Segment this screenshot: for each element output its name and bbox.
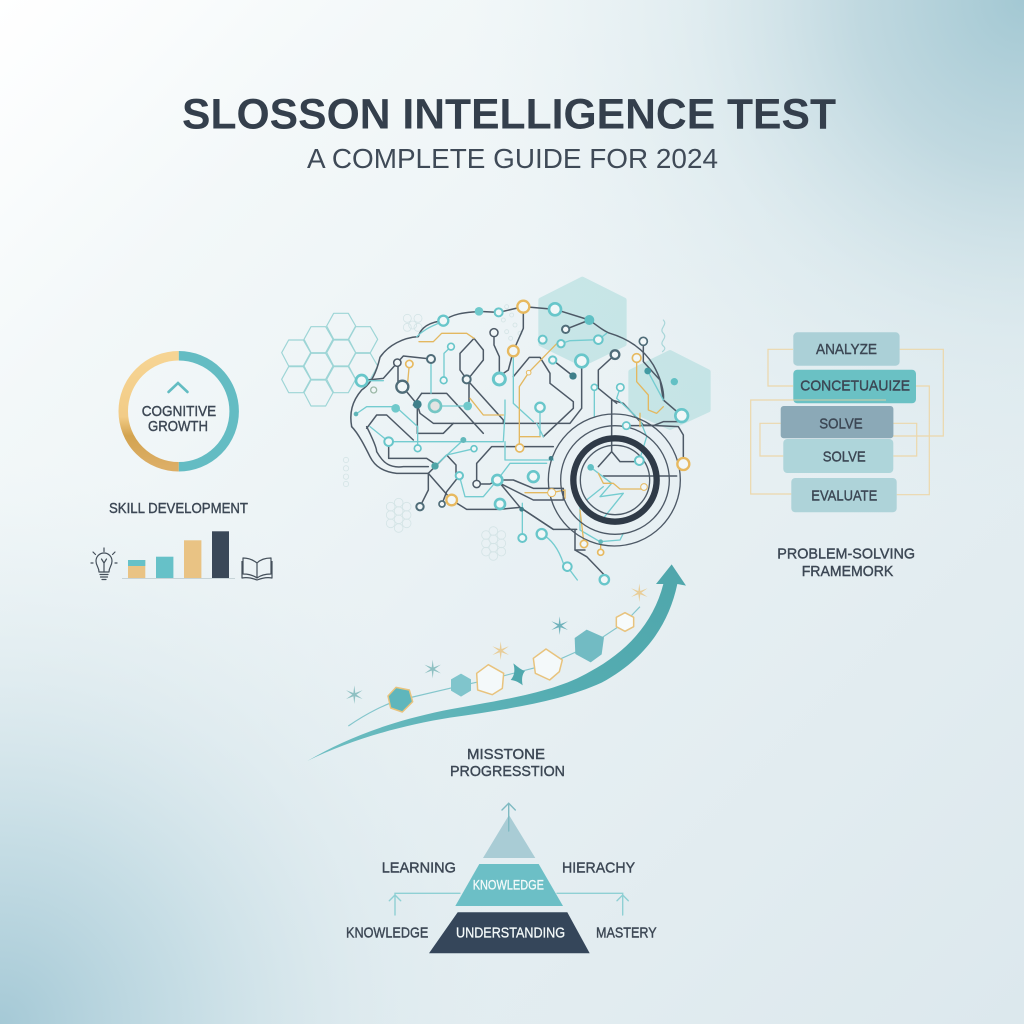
ring label	[142, 403, 216, 435]
step: solve dark: SOLVE	[819, 416, 863, 433]
heading: SKILL DEVELOPMENT	[109, 500, 248, 517]
bar chart	[122, 531, 235, 578]
step: analyze: ANALYZE	[816, 341, 877, 358]
label: hierarchy: HIERACHY	[562, 859, 635, 876]
arrow ribbon	[307, 564, 686, 761]
step: solve light	[783, 439, 893, 473]
DNA squiggle	[662, 320, 665, 352]
panel: skill development	[91, 500, 272, 580]
circuit nodes: gold rings	[406, 301, 689, 555]
framework caption: FRAMEMORK	[802, 563, 893, 580]
ring label: GROWTH	[148, 418, 208, 435]
panel: problem-solving framework	[751, 332, 943, 580]
target rings	[548, 414, 680, 546]
milestone path	[348, 607, 640, 726]
circuit nodes: teal rings	[356, 303, 688, 584]
title: SLOSSON INTELLIGENCE TEST	[182, 90, 836, 138]
step: conceptualize: CONCETUAUIZE	[800, 378, 910, 395]
panel: milestone progression	[307, 564, 686, 780]
teal circuit traces	[356, 321, 663, 580]
step: solve dark	[781, 406, 893, 438]
milestone caption	[450, 746, 565, 780]
ring label: COGNITIVE	[142, 403, 216, 420]
framework caption: PROBLEM-SOLVING	[777, 546, 915, 563]
hierarchy arrows	[389, 803, 628, 915]
step: conceptualize	[793, 370, 916, 403]
icon: open book	[242, 558, 272, 580]
pale background hexagons	[541, 279, 708, 428]
milestone hexagons	[388, 613, 634, 712]
framework caption	[777, 546, 915, 580]
gold circuit traces	[407, 333, 663, 552]
subtitle: A COMPLETE GUIDE FOR 2024	[307, 143, 718, 174]
milestone caption: PROGRESSTION	[450, 763, 565, 780]
label: understanding tier: UNDERSTANDING	[456, 924, 565, 941]
panel: learning hierarchy pyramid	[346, 803, 657, 953]
label: learning: LEARNING	[382, 859, 456, 876]
panel: cognitive growth ring	[123, 356, 234, 467]
faint molecule clusters	[343, 305, 522, 560]
icon: light bulb	[91, 548, 117, 580]
sparkle stars	[346, 583, 648, 704]
milestone caption: MISSTONE	[467, 746, 545, 763]
pyramid middle tier	[455, 864, 563, 906]
pyramid top tier	[483, 815, 535, 858]
step: solve light: SOLVE	[823, 449, 866, 466]
step: analyze	[793, 332, 900, 366]
dark circuit traces	[351, 307, 683, 575]
label: knowledge: KNOWLEDGE	[346, 924, 428, 941]
step: evaluate	[791, 478, 897, 512]
step: evaluate: EVALUATE	[811, 487, 877, 504]
circuit nodes: filled	[354, 307, 678, 544]
chevron icon	[168, 383, 188, 392]
circuit nodes: dark rings	[394, 326, 647, 510]
ring chart	[123, 356, 234, 467]
pyramid bottom tier	[429, 912, 590, 953]
connector lines	[751, 349, 943, 495]
panel: brain circuit	[282, 279, 708, 584]
label: mastery: MASTERY	[596, 924, 657, 941]
growth arrow and milestones	[307, 564, 686, 761]
hexagon grid	[282, 313, 378, 406]
label: knowledge tier: KNOWLEDGE	[473, 878, 544, 893]
